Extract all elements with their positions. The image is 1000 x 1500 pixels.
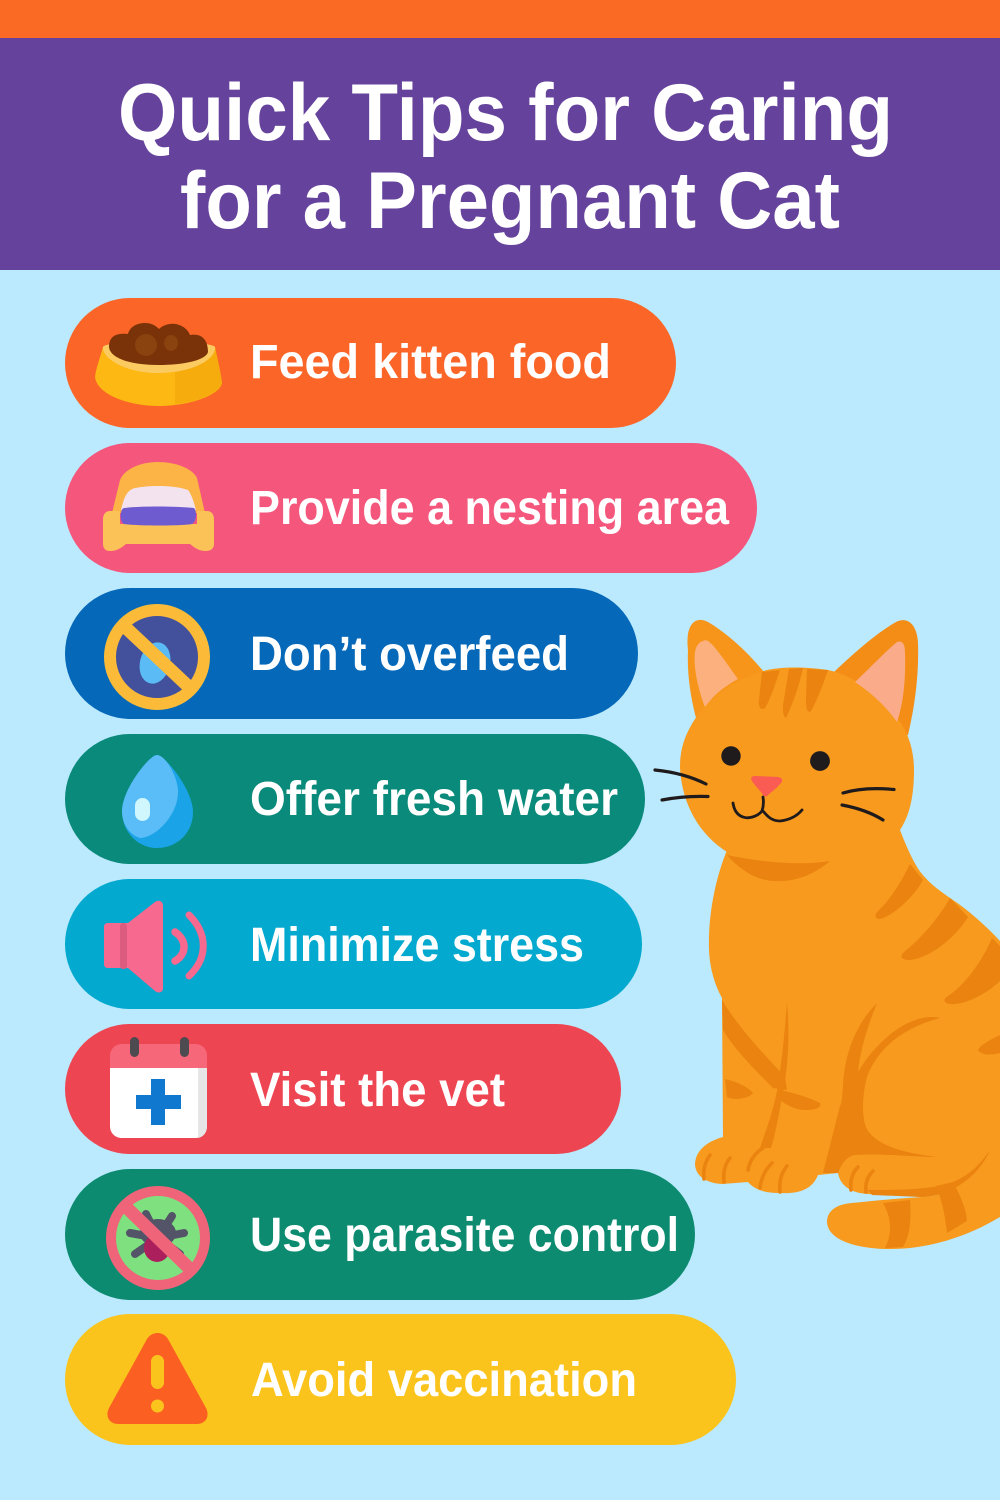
tip: don't overfeed (65, 588, 638, 719)
title (118, 68, 893, 246)
tip: parasite control (65, 1169, 695, 1300)
cat tail (827, 1180, 1000, 1249)
cat face (655, 746, 894, 821)
icon: cat bed (103, 462, 214, 551)
tip: minimize stress (65, 879, 642, 1009)
icon: no parasites (111, 1191, 205, 1285)
label: Use parasite control (250, 1209, 679, 1262)
label: Offer fresh water (250, 773, 618, 826)
cat right ear (834, 620, 918, 735)
cat claws (704, 1148, 873, 1192)
title: Quick Tips for Caring (118, 68, 893, 158)
icon: warning triangle (107, 1333, 208, 1424)
cat head (680, 668, 914, 868)
icon: vet calendar (110, 1037, 207, 1138)
top accent bar (0, 0, 1000, 38)
header panel (0, 38, 1000, 270)
cat inner ears (695, 640, 905, 722)
tip: visit the vet (65, 1024, 621, 1154)
tip: feed kitten food (65, 298, 676, 428)
cat stripes (722, 864, 1000, 1248)
label: Visit the vet (250, 1064, 505, 1117)
icon: food bowl (95, 323, 222, 406)
tip: fresh water (65, 734, 645, 864)
icon: water drop (122, 755, 193, 848)
cat left ear (687, 620, 764, 730)
tip: nesting area (65, 443, 757, 573)
icon: no overfeeding (110, 610, 204, 704)
label: Minimize stress (250, 919, 584, 972)
label: Feed kitten food (250, 336, 611, 389)
title: for a Pregnant Cat (180, 156, 840, 246)
label: Don’t overfeed (250, 628, 569, 681)
cat forehead stripes (727, 668, 830, 881)
label: Provide a nesting area (250, 482, 729, 535)
tip: avoid vaccination (65, 1314, 736, 1445)
icon: speaker (104, 901, 203, 992)
cat body (695, 830, 1000, 1197)
label: Avoid vaccination (251, 1354, 637, 1407)
illustration: orange tabby cat (655, 620, 1000, 1249)
